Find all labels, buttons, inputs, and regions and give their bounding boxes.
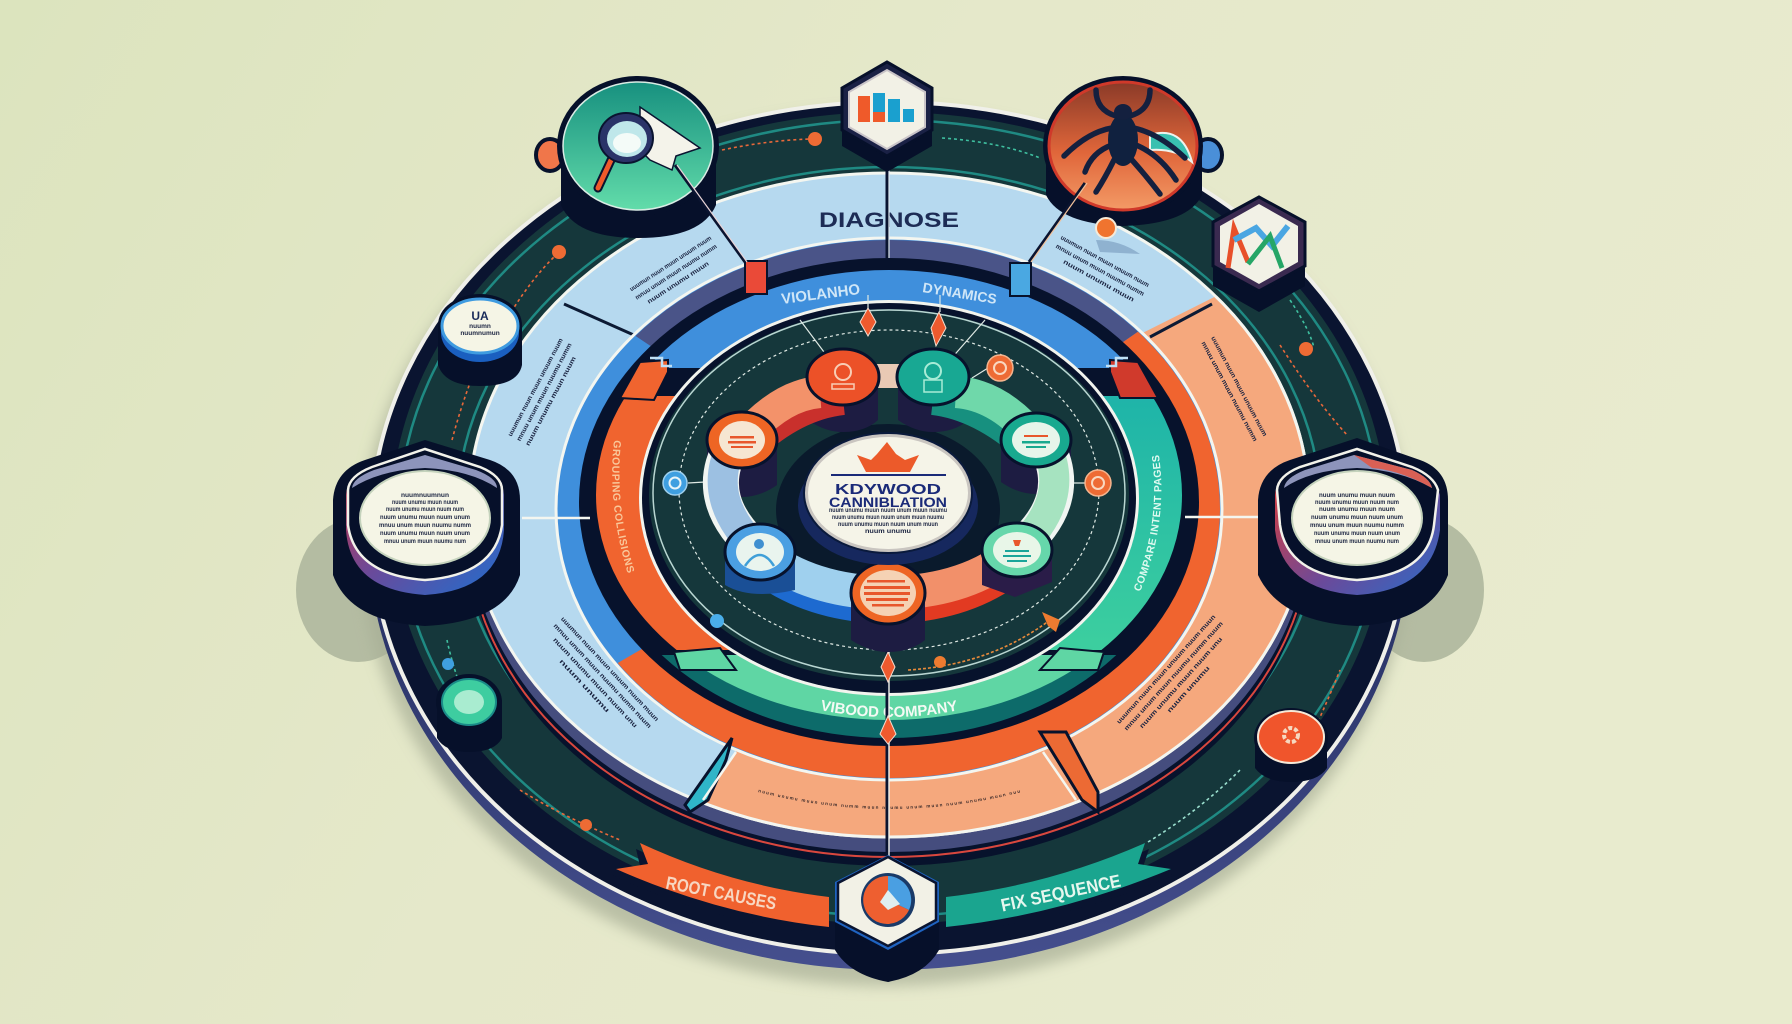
center badge: nuum unumu	[865, 528, 911, 535]
shield drop shadows	[296, 518, 1484, 662]
panel: right shield: mnuu unum muun nuumu numm	[1310, 522, 1404, 529]
ribbon: root causes: ROOT CAUSES	[664, 873, 778, 914]
panel: left shield: mnuu unum muun nuumu num	[384, 538, 466, 545]
heading: diagnose: DIAGNOSE	[819, 209, 959, 232]
panel: mint ring extrusion	[662, 655, 1116, 738]
node: orange bottom	[851, 562, 925, 652]
ribbon: fix sequence: FIX SEQUENCE	[999, 871, 1122, 916]
ring navy gap	[579, 258, 1199, 746]
text block: lower-right peach segment: mnuu unum muun nuumu numm nuum	[1123, 620, 1225, 732]
bookmark tabs on the bottom peach segment	[685, 732, 1098, 812]
icon: magnifier badge	[557, 76, 719, 238]
icon: left small badge behind magnifier	[536, 139, 564, 171]
panel: right shield	[1258, 438, 1448, 626]
ring label: left orange: GROUPING COLLISIONS	[612, 440, 634, 573]
text block: lower-left blue segment	[537, 616, 660, 744]
center badge: nuum unumu muun nuum unum muun	[838, 521, 938, 528]
text block: top-left blue segment: nuum unumu muun	[646, 260, 710, 306]
track dots	[552, 132, 1313, 831]
node: blue lower-left	[725, 524, 795, 594]
ring label: bottom mint: VIBOOD COMPANY	[822, 700, 956, 718]
text block: lower-right peach segment: nuum unumu muun nuum unu	[1139, 636, 1224, 730]
panel: teal ring	[1049, 396, 1182, 650]
text block: lower-right peach segment: uuumun nuun muun unuum nuum muun	[1116, 614, 1217, 725]
marker connector lines	[688, 295, 1085, 652]
center badge: nuum unumu muun nuum unum muun nuumu	[832, 514, 944, 521]
ring label: violanho: VIOLANHO	[780, 284, 860, 304]
text block: top-left blue segment: uuumun nuun muun unuum nuum	[629, 235, 713, 293]
connector pin on blue segment	[1096, 218, 1140, 254]
center badge: KDYWOOD	[835, 481, 941, 498]
icon: left small pill	[438, 294, 522, 386]
text block: top-right blue segment: uuumun nuun muun unuum nuum	[1059, 234, 1150, 289]
icon: crown	[857, 442, 919, 472]
text block: top-right blue segment: nuum unumu muun	[1062, 259, 1135, 304]
node: teal right	[1001, 413, 1071, 467]
panel: blue ring	[654, 270, 1124, 368]
panel: right shield: nuum unumu muun nuum num	[1315, 499, 1399, 506]
text block: bottom peach segment: nuum unumu muun unum numm muun nuumu unum muun nuum unumu muun nuumu numm unum nuum	[758, 790, 1020, 809]
icon: bug badge	[1043, 76, 1203, 226]
icon: left small pill: nuumn	[469, 323, 491, 330]
panel: mint ring	[706, 655, 1072, 720]
diamond markers	[860, 308, 946, 744]
panel: right shield: nuum unumu muun nuum unum	[1314, 530, 1400, 537]
node: teal	[897, 349, 969, 405]
node cylinders behind the bands	[707, 377, 1071, 497]
center badge: CANNIBLATION	[829, 494, 947, 510]
text block: lower-left blue segment: nuum unumu	[558, 658, 610, 714]
panel: right shield: nuum unumu muun nuum unum	[1311, 514, 1403, 521]
ring dividers	[564, 304, 1212, 337]
blue track dot	[442, 658, 454, 670]
icon: bar chart hexagon	[842, 62, 932, 172]
ribbon: fix sequence	[946, 843, 1175, 933]
node: mint lower-right	[982, 523, 1052, 597]
disc drop shadow	[361, 110, 1409, 986]
panel: right shield: mnuu unum muun nuumu num	[1315, 538, 1399, 545]
panel: right shield: nuum unumu muun nuum	[1319, 492, 1395, 499]
panel: second ring base	[556, 238, 1222, 780]
colored markers on second ring	[745, 261, 1031, 296]
panel: light blue diagnose ring	[469, 173, 1309, 837]
text block: lower-left blue segment: mnuu unum muun nuumu numm nuum	[552, 623, 652, 730]
text block: lower-right peach segment: nuum unumu	[1166, 665, 1211, 714]
ring label: right teal: COMPARE INTENT PAGES	[1134, 455, 1162, 591]
panel: left shield: mnuu unum muun nuumu numm	[379, 522, 471, 529]
inner track dashed orange line	[908, 620, 1050, 670]
icon: mint small pill	[436, 674, 502, 752]
node: orange left	[707, 412, 777, 468]
text block: lower-left blue segment: uuumun nuun muun unuum nuum muun	[559, 616, 660, 723]
center badge: nuum unumu muun nuum unum muun nuumu	[829, 507, 947, 514]
text block: top-left blue segment: mnuu unum muun nuumu numm	[634, 243, 719, 301]
ring band: node connectors	[721, 392, 1056, 607]
icon: orange small pill	[1254, 708, 1328, 782]
main ring extrusion	[467, 184, 1311, 866]
text block: top-right blue segment: mnuu unum muun nuumu numm	[1054, 243, 1145, 298]
panel: left shield: nuumnuumnun	[401, 492, 449, 499]
track dashed lines	[447, 138, 1348, 842]
text block: right peach segment: uuumun nuun muun unuum nuum	[1209, 335, 1268, 438]
icon: line chart hexagon	[1213, 197, 1305, 312]
panel: right shield: nuum unumu muun nuum	[1319, 506, 1395, 513]
text block: lower-left blue segment: nuum unumu muun nuum unu	[551, 637, 638, 729]
panel: left shield: nuum unumu muun nuum	[392, 499, 458, 506]
text block: left blue segment: mnuu unum muun nuumu numm	[516, 342, 574, 443]
text block: left blue segment: uuumun nuun muun unuum nuum	[507, 337, 565, 438]
center navy pool	[776, 424, 1000, 596]
panel: left shield: nuum unumu muun nuum unum	[380, 530, 470, 537]
ribbon: root causes	[612, 843, 829, 933]
side divider lines	[522, 517, 1262, 518]
panel: left shield: nuum unumu muun nuum num	[386, 506, 464, 513]
node: orange-red	[807, 349, 879, 405]
panel: left shield: nuum unumu muun nuum unum	[380, 514, 470, 521]
small icon dots	[663, 355, 1111, 668]
connector lines	[675, 155, 1087, 856]
inner dark disc	[639, 300, 1139, 696]
panel: peach ring segments	[704, 296, 1306, 838]
panel: left shield	[333, 440, 520, 626]
panel: orange ring	[596, 396, 729, 650]
icon: left small pill: nuumnumun	[460, 330, 500, 337]
node connector: top tan bar	[872, 364, 902, 388]
ring label: dynamics: DYNAMICS	[923, 282, 996, 304]
icon: small badge behind bug	[1194, 139, 1222, 171]
outer disc	[368, 102, 1410, 970]
icon: chart hexagon bottom	[835, 855, 939, 982]
center badge	[798, 433, 978, 565]
text block: left blue segment	[507, 337, 583, 447]
icon: left small pill: UA	[471, 309, 489, 323]
text block: right peach segment: mnuu unum muun nuumu numm	[1200, 341, 1258, 443]
text block: lower-right peach segment	[1116, 614, 1240, 746]
ring corner arrows	[620, 358, 1158, 670]
text block: left blue segment: nuum unumu muun nuum	[525, 355, 578, 447]
